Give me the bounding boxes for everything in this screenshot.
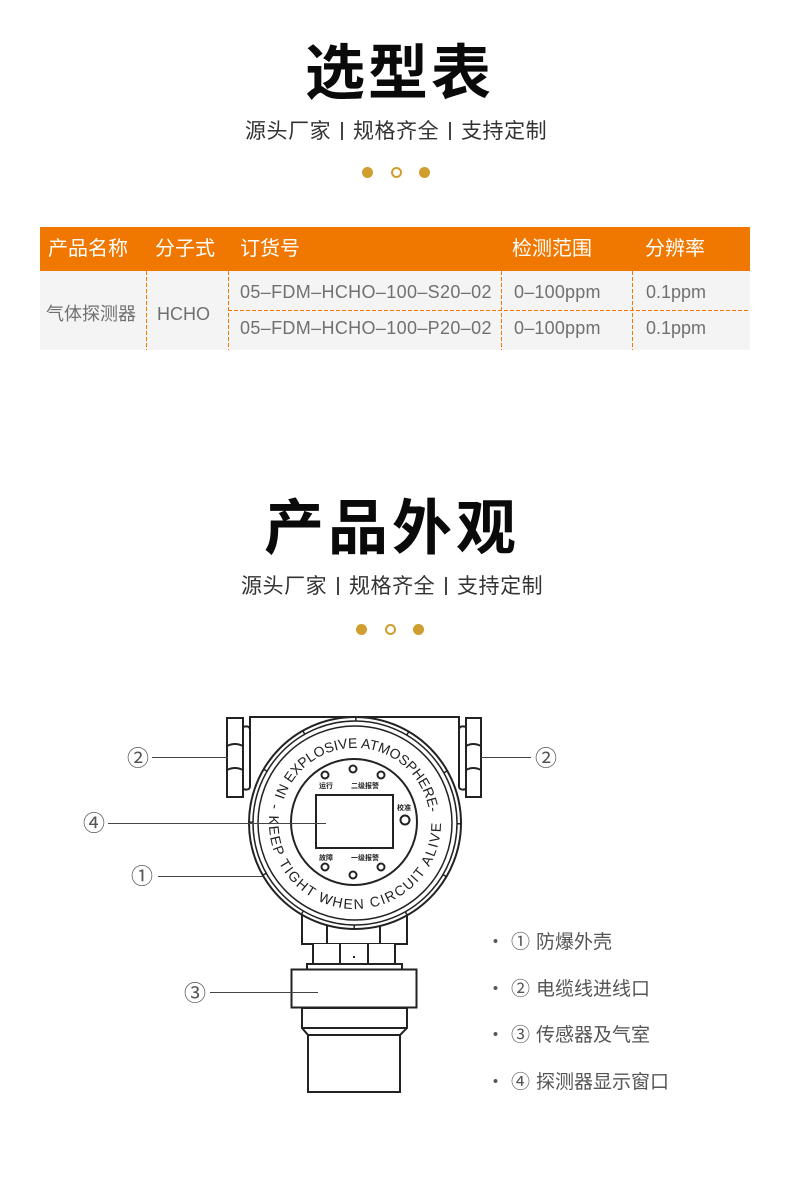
table header: product name: 产品名称 [48, 232, 128, 261]
subtitle: product appearance [241, 570, 543, 600]
panel labels: 故障 [319, 853, 333, 863]
legend item 1: • [486, 927, 505, 954]
legend item 3: 传感器及气室 [536, 1020, 650, 1047]
subtitle: selection table [245, 115, 547, 145]
leader lines [108, 758, 531, 992]
table cell: range 2: 0–100ppm [514, 318, 601, 338]
subtitle: product appearance: 源头厂家 [241, 570, 327, 600]
legend item 2 [486, 974, 650, 1001]
right cable gland [459, 718, 481, 797]
left cable gland [227, 718, 250, 797]
detector front circle [249, 717, 461, 929]
legend item 3: ③ [511, 1020, 530, 1047]
legend item 3: • [486, 1020, 505, 1047]
subtitle: selection table: 源头厂家 [245, 115, 331, 145]
legend item 1: 防爆外壳 [536, 927, 612, 954]
lower body [292, 905, 416, 1092]
table cell: order number 2: 05–FDM–HCHO–100–P20–02 [240, 318, 492, 338]
panel labels: 一级报警 [351, 853, 379, 863]
indicator lamps [322, 766, 410, 878]
table cell: resolution 1: 0.1ppm [646, 282, 706, 302]
table cell: resolution 2: 0.1ppm [646, 318, 706, 338]
dots: product appearance [356, 624, 424, 635]
ring text [268, 738, 441, 910]
subtitle: product appearance: 支持定制 [457, 570, 543, 600]
table header: range: 检测范围 [512, 232, 592, 261]
legend item 1: ① [511, 927, 530, 954]
table cell: range 1: 0–100ppm [514, 282, 601, 302]
panel labels: 校准 [397, 803, 411, 813]
legend item 2: 电缆线进线口 [536, 974, 650, 1001]
panel labels [319, 781, 411, 863]
table header: resolution: 分辨率 [645, 232, 705, 261]
legend item 1 [486, 927, 612, 954]
table cell: order number 1: 05–FDM–HCHO–100–S20–02 [240, 282, 492, 302]
callout: number 2 left: ② [127, 746, 149, 771]
subtitle: selection table: 规格齐全 [353, 115, 439, 145]
table cell: formula: HCHO [157, 304, 210, 324]
table: product selection [40, 227, 750, 350]
panel labels: 运行 [319, 781, 333, 791]
callout: number 4: ④ [83, 811, 105, 836]
heading: selection table: 选型表 [305, 25, 494, 112]
legend item 4: • [486, 1067, 505, 1094]
legend item 3 [486, 1020, 650, 1047]
callout: number 2 right: ② [535, 746, 557, 771]
panel labels: 二级报警 [351, 781, 379, 791]
callout: number 3: ③ [184, 981, 206, 1006]
ring text: IN EXPLOSIVE ATMOSPHERE- [275, 738, 438, 812]
heading: product appearance: 产品外观 [264, 480, 520, 567]
legend item 2: • [486, 974, 505, 1001]
detector housing top [250, 717, 459, 760]
legend item 2: ② [511, 974, 530, 1001]
ring text: - KEEP TIGHT WHEN CIRCUIT ALIVE [268, 804, 441, 910]
legend item 4: 探测器显示窗口 [536, 1067, 669, 1094]
callout: number 1: ① [131, 864, 153, 889]
table header: order number: 订货号 [240, 232, 300, 261]
table header: formula: 分子式 [155, 232, 215, 261]
dots: selection table [362, 167, 430, 178]
table cell: product name: 气体探测器 [46, 300, 136, 326]
subtitle: product appearance: 规格齐全 [349, 570, 435, 600]
subtitle: selection table: 支持定制 [461, 115, 547, 145]
legend item 4: ④ [511, 1067, 530, 1094]
